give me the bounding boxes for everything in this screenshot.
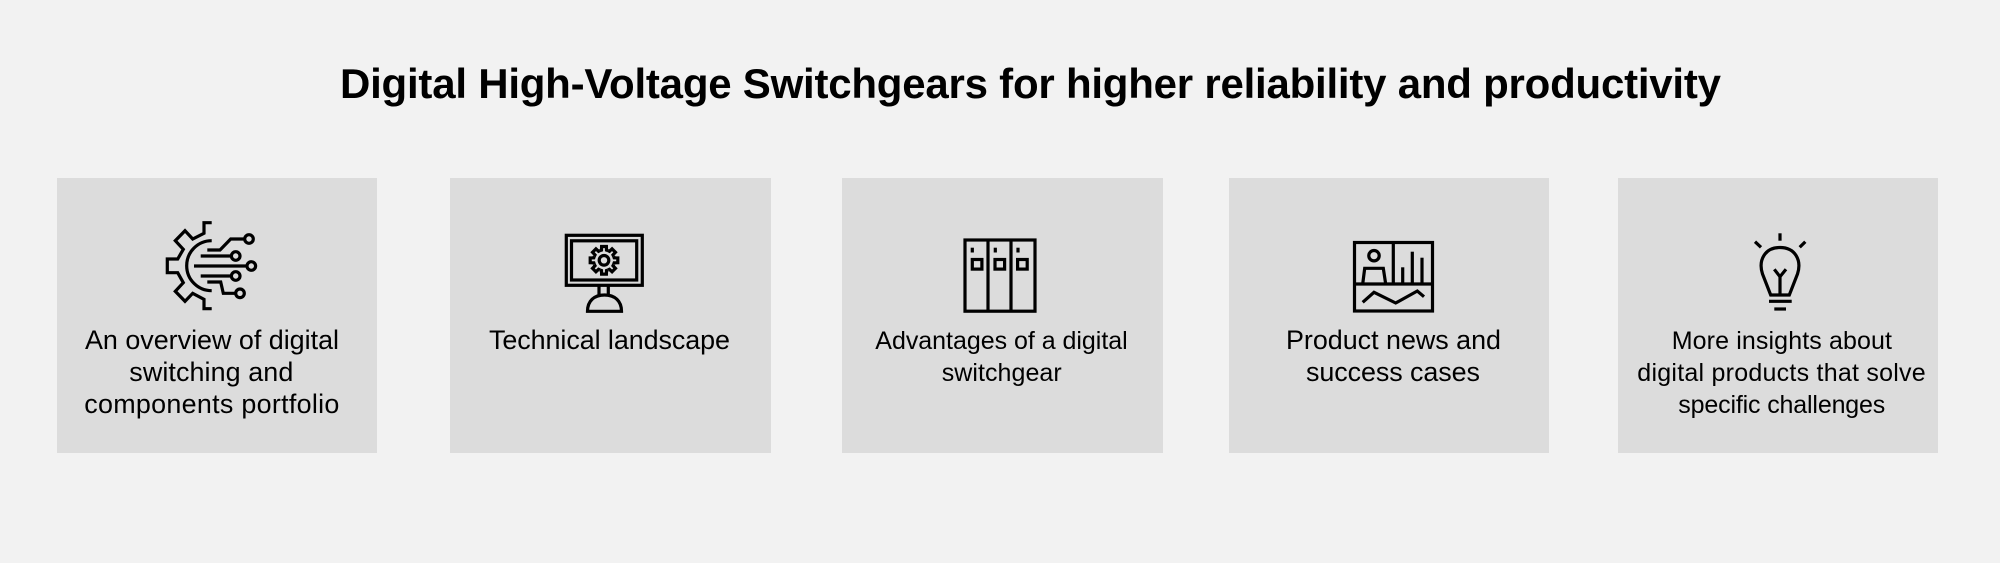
panel text: product news [1286, 325, 1501, 387]
icon: presentation dashboard [1354, 242, 1432, 311]
panel text: more insights [1637, 327, 1926, 419]
panel text: more insights: More insights about [1672, 327, 1892, 355]
title: Digital High-Voltage Switchgears for higher reliability and productivity [340, 60, 1722, 107]
panel: digital switching overview [57, 178, 377, 453]
panel: technical landscape [450, 178, 771, 453]
panel text: advantages: switchgear [942, 359, 1062, 387]
panel text: overview: components portfolio [84, 389, 339, 419]
panel text: advantages [875, 327, 1128, 387]
panel text: more insights: digital products that solve [1637, 359, 1926, 387]
panel text: overview [84, 325, 339, 419]
panel: more insights [1618, 178, 1938, 453]
icon: switchgear cabinets [965, 240, 1035, 311]
panel text: product news: success cases [1306, 357, 1480, 387]
icon: gear with circuit traces [167, 223, 256, 309]
panel text: overview: An overview of digital [85, 325, 339, 355]
panel text: more insights: specific challenges [1678, 391, 1885, 419]
panel text: technical landscape: Technical landscape [489, 325, 730, 355]
panel text: advantages: Advantages of a digital [875, 327, 1128, 355]
panel text: overview: switching and [129, 357, 293, 387]
panel: product news [1229, 178, 1549, 453]
panel text: product news: Product news and [1286, 325, 1501, 355]
icon: light bulb [1755, 233, 1805, 309]
panel: advantages [842, 178, 1163, 453]
icon: monitor with gear [566, 235, 642, 311]
